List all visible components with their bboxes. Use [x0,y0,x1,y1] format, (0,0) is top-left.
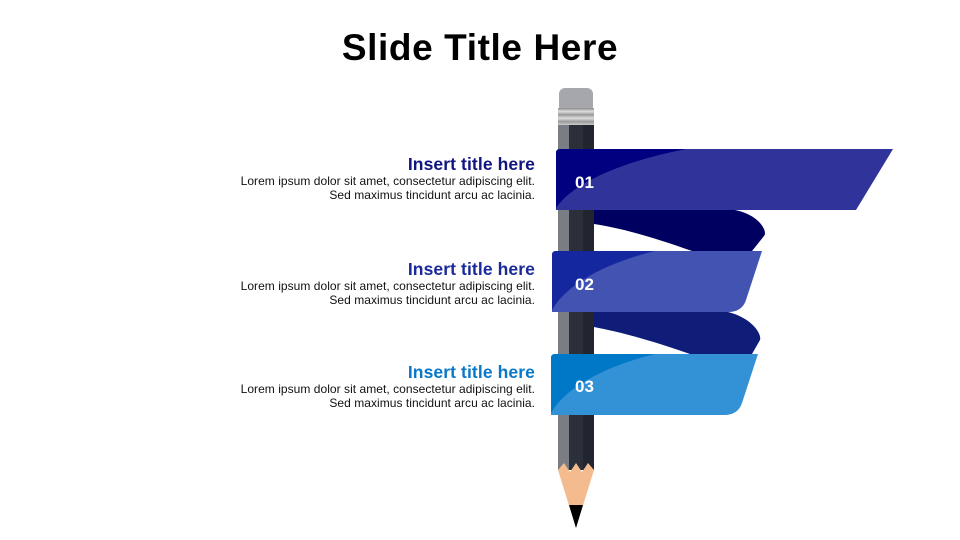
text block 3: Lorem ipsum dolor sit amet, consectetur adipiscing elit. [241,382,535,396]
ribbon 1 [556,149,893,210]
ribbon 3 [551,354,758,415]
text block 3: Sed maximus tincidunt arcu ac lacinia. [329,396,535,410]
ribbon 1: 01 [575,173,594,192]
fold between ribbon 2 and 3 [594,312,760,354]
ribbon 2: 02 [575,275,594,294]
text block 2 [241,259,535,307]
ribbon 2 [552,251,762,312]
icon: pencil [558,88,594,528]
text block 1: Insert title here [408,154,535,174]
title: Slide Title Here [342,27,618,68]
fold between ribbon 1 and 2 [594,210,765,251]
text block 2: Insert title here [408,259,535,279]
ribbon 3: 03 [575,377,594,396]
text block 1 [241,154,535,202]
text block 3 [241,362,535,410]
text block 1: Lorem ipsum dolor sit amet, consectetur adipiscing elit. [241,174,535,188]
text block 1: Sed maximus tincidunt arcu ac lacinia. [329,188,535,202]
text block 2: Lorem ipsum dolor sit amet, consectetur adipiscing elit. [241,279,535,293]
text block 3: Insert title here [408,362,535,382]
text block 2: Sed maximus tincidunt arcu ac lacinia. [329,293,535,307]
